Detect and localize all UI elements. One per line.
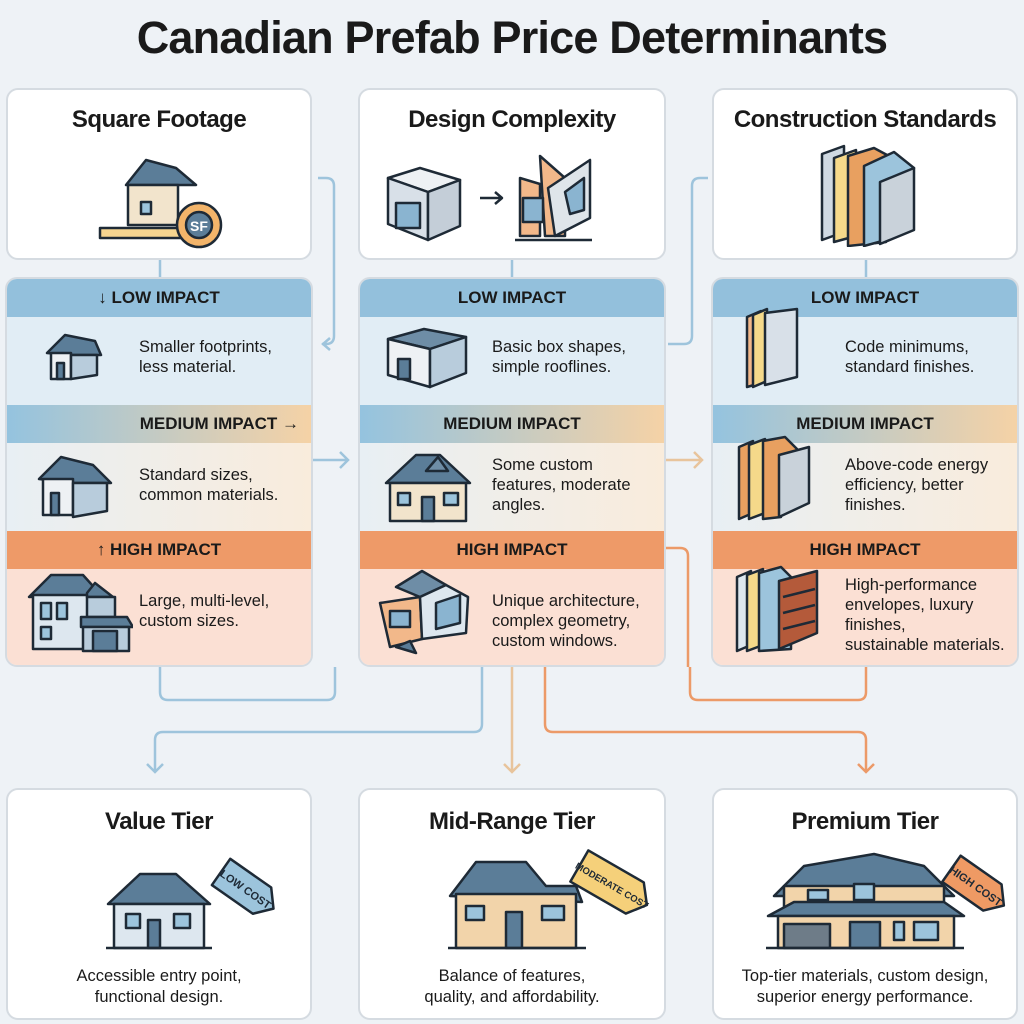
icon: basic wall [746, 308, 798, 388]
high impact header: HIGH IMPACT [456, 540, 568, 559]
icon: mid house with moderate cost tag [448, 849, 650, 950]
title: Canadian Prefab Price Determinants [137, 12, 887, 63]
medium impact header [360, 405, 664, 443]
panel: construction standards impact: envelopes, luxury [845, 596, 973, 614]
panel: mid-range tier [358, 788, 666, 1020]
panel: square footage impact: Smaller footprints, [139, 338, 272, 356]
panel: design complexity impact: custom windows. [492, 632, 618, 650]
panel: construction standards impact: sustainable materials. [845, 636, 1005, 654]
panel: square footage impact: custom sizes. [139, 612, 239, 630]
panel: square footage impact [5, 277, 313, 667]
high impact header [360, 531, 664, 569]
icon: box to complex building [386, 154, 592, 242]
panel: design complexity impact: Some custom [492, 456, 593, 474]
panel: construction standards impact: finishes. [845, 496, 906, 514]
panel: premium tier: Top-tier materials, custom design, [742, 967, 988, 985]
panel: premium tier: Premium Tier [792, 808, 938, 835]
icon: small house [46, 334, 102, 380]
panel: design complexity top [358, 88, 666, 260]
panel: construction standards impact: Code minimums, [845, 338, 969, 356]
icon: custom house [384, 454, 472, 522]
low impact header: LOW IMPACT [811, 288, 919, 307]
panel: value tier [6, 788, 312, 1020]
panel: construction standards top: Construction Standards [734, 106, 996, 133]
panel: premium tier: superior energy performance. [757, 988, 973, 1006]
panel: mid-range tier: quality, and affordability. [424, 988, 600, 1006]
icon: wall layers [820, 144, 916, 247]
low impact header [713, 279, 1017, 317]
medium impact header [713, 405, 1017, 443]
panel: construction standards impact [711, 277, 1019, 667]
medium impact header: MEDIUM IMPACT → [140, 414, 299, 433]
high impact header [713, 531, 1017, 569]
high impact header [7, 531, 311, 569]
icon: high performance wall [736, 566, 818, 652]
panel: value tier: Accessible entry point, [76, 967, 242, 985]
panel: square footage impact: common materials. [139, 486, 278, 504]
panel: construction standards impact: efficiency, better [845, 476, 964, 494]
medium impact header: MEDIUM IMPACT [796, 414, 934, 433]
medium impact header: MEDIUM IMPACT [443, 414, 581, 433]
panel: square footage top [6, 88, 312, 260]
panel: design complexity impact: Basic box shapes, [492, 338, 626, 356]
panel: design complexity impact: Unique architecture, [492, 592, 640, 610]
icon: large house [28, 574, 133, 652]
panel: mid-range tier: Mid-Range Tier [429, 808, 595, 835]
icon: complex geometry [378, 570, 470, 654]
panel: square footage impact: Standard sizes, [139, 466, 253, 484]
panel: value tier: functional design. [95, 988, 223, 1006]
panel: construction standards impact: standard finishes. [845, 358, 974, 376]
high impact header: ↑ HIGH IMPACT [97, 540, 221, 559]
panel: premium tier [712, 788, 1018, 1020]
panel: construction standards impact: Above-code energy [845, 456, 988, 474]
icon: large house with high cost tag: HIGH COST [947, 864, 1004, 909]
icon: small house with low cost tag: LOW COST [217, 868, 273, 912]
panel: square footage top: Square Footage [72, 106, 246, 133]
low impact header [7, 279, 311, 317]
icon: basic box [386, 328, 468, 388]
panel: design complexity impact: angles. [492, 496, 545, 514]
panel: construction standards top [712, 88, 1018, 260]
icon: large house with high cost tag [766, 852, 1006, 950]
panel: design complexity impact: simple rooflines. [492, 358, 611, 376]
panel: design complexity top: Design Complexity [408, 106, 616, 133]
icon: house with tape measure [98, 158, 222, 248]
low impact header: LOW IMPACT [458, 288, 566, 307]
low impact header [360, 279, 664, 317]
panel: design complexity impact [358, 277, 666, 667]
panel: square footage impact: less material. [139, 358, 236, 376]
medium impact header [7, 405, 311, 443]
panel: square footage impact: Large, multi-level, [139, 592, 269, 610]
icon: small house with low cost tag [106, 858, 275, 950]
low impact header: ↓ LOW IMPACT [98, 288, 220, 307]
panel: design complexity impact: complex geometry, [492, 612, 630, 630]
icon: mid house with moderate cost tag: MODERATE COST [573, 861, 650, 912]
panel: design complexity impact: features, moderate [492, 476, 630, 494]
icon: insulated wall [738, 436, 810, 520]
panel: construction standards impact: High-performance [845, 576, 977, 594]
icon: house with tape measure: SF [190, 218, 208, 234]
high impact header: HIGH IMPACT [809, 540, 921, 559]
panel: mid-range tier: Balance of features, [439, 967, 585, 985]
panel: construction standards impact: finishes, [845, 616, 906, 634]
panel: value tier: Value Tier [105, 808, 213, 835]
icon: medium house [38, 456, 112, 518]
